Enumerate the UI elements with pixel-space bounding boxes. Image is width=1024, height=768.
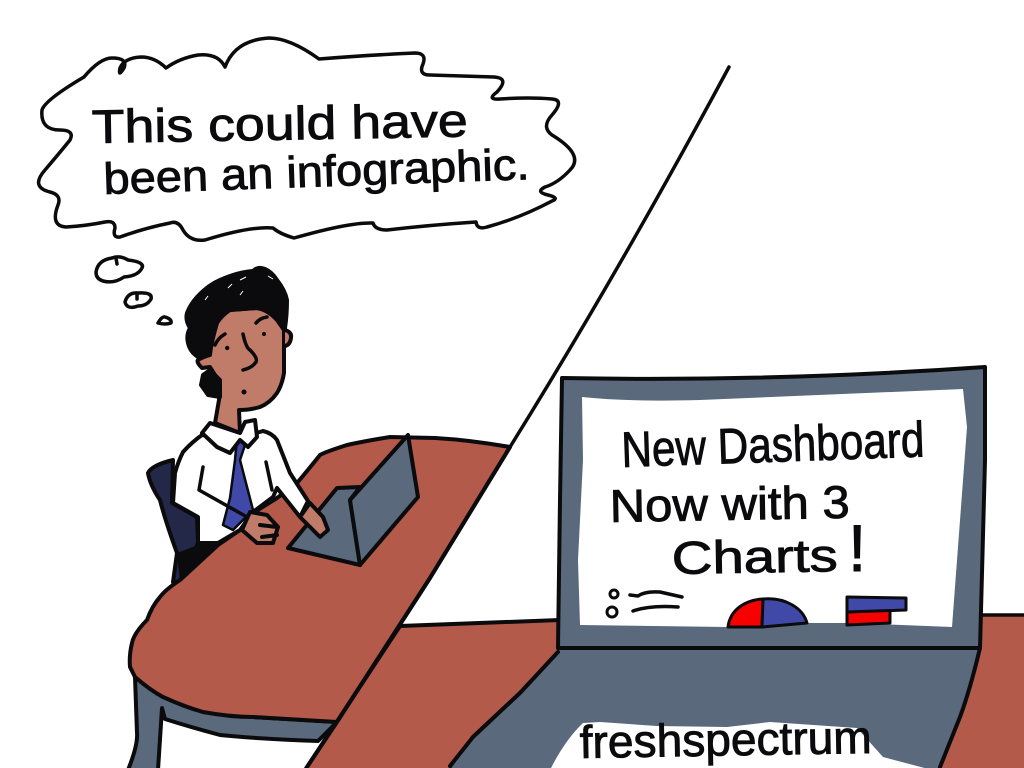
left desk (130, 437, 510, 722)
screen line 1: New Dashboard (620, 411, 925, 478)
screen line 3: Charts (671, 529, 838, 584)
left hand (242, 512, 278, 543)
tie (223, 438, 253, 530)
white brand tag (550, 722, 932, 768)
puff large (96, 257, 142, 282)
hair bun (201, 370, 220, 397)
desk behind monitor left (305, 620, 560, 768)
right desk (305, 615, 1024, 768)
legend markers (607, 590, 618, 617)
screen (578, 389, 967, 627)
large laptop (450, 367, 985, 768)
small laptop (288, 435, 418, 565)
desk leg and rail (128, 677, 337, 768)
diagonal lower divider (307, 447, 510, 767)
chair (148, 460, 198, 582)
hair highlights (205, 276, 273, 300)
collar (202, 420, 257, 453)
red bar (847, 610, 890, 625)
eyes (225, 332, 266, 350)
desk right part (938, 615, 1024, 768)
pants (177, 545, 216, 582)
small thought puffs (96, 257, 171, 324)
shirt (173, 431, 308, 543)
brand text: freshspectrum (579, 711, 872, 768)
bubble outline (39, 38, 575, 240)
neck and face (198, 308, 284, 433)
puff small (158, 317, 171, 324)
bubble text line 2: been an infographic. (103, 140, 530, 204)
right hand (300, 503, 328, 537)
blue bar (847, 597, 906, 612)
legend labels (630, 592, 682, 611)
bubble text line 1: This could have (91, 93, 468, 153)
pie red slice (728, 599, 763, 627)
pie chart (728, 599, 807, 627)
keyboard base (450, 648, 981, 768)
eyebrows (215, 317, 267, 345)
mouth (242, 390, 246, 394)
laptop lid (350, 435, 418, 565)
exclamation mark: ! (848, 511, 866, 585)
diagonal panel divider (510, 67, 729, 447)
thought bubble (39, 38, 575, 240)
legend (607, 590, 682, 617)
bar chart (847, 597, 906, 625)
screen line 2: Now with 3 (609, 476, 850, 532)
pie blue slice (762, 599, 807, 627)
laptop base (288, 487, 360, 565)
puff medium (125, 293, 151, 307)
monitor frame (558, 367, 985, 648)
nose (243, 334, 256, 370)
arm line (199, 462, 272, 517)
base edges (450, 648, 980, 767)
hair (186, 268, 287, 357)
man (173, 268, 308, 582)
desk top right edge (980, 613, 1024, 617)
right ear (285, 330, 291, 346)
